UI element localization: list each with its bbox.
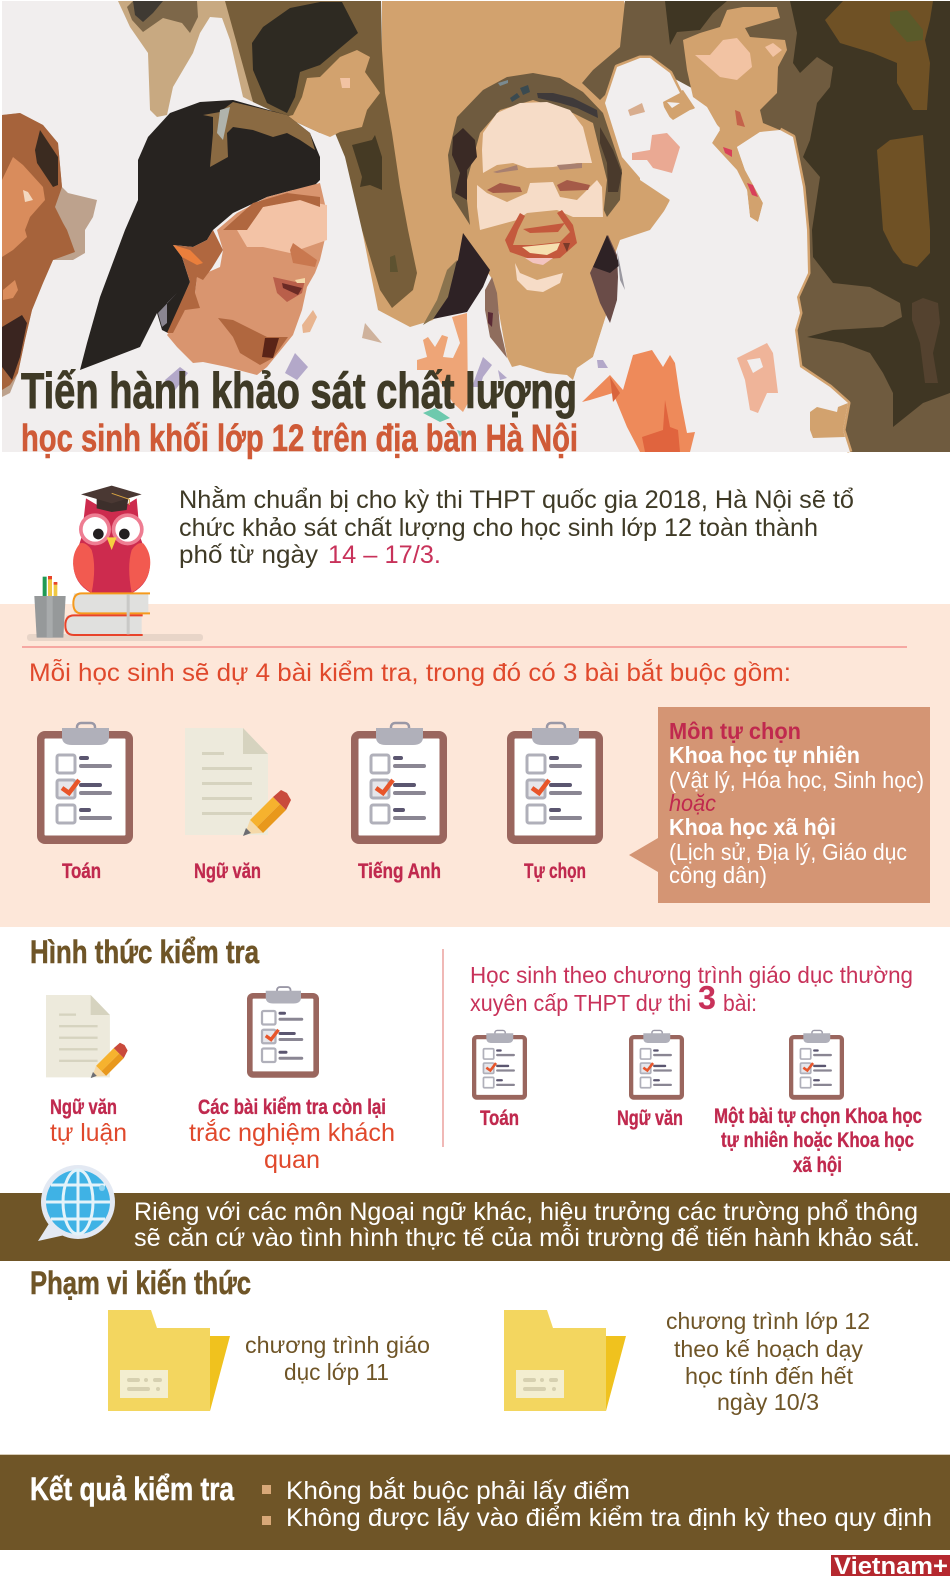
icon: clipboard [247,987,319,1078]
label: Toán: Toán [62,860,101,883]
label: Ngữ văn: Ngữ văn [194,860,261,883]
text: grade 11: dục lớp 11 [284,1359,389,1385]
text: three tests: xuyên cấp THPT dự thi [470,990,691,1016]
logo: Vietnam+: Vietnam+ [834,1553,948,1580]
band: test results [0,1454,950,1550]
label: Ngữ văn essay: tự luận [50,1119,127,1147]
bullet list: Không được lấy vào điểm kiểm tra định kỳ theo quy định [286,1504,932,1532]
label: other tests multiple choice [189,1096,395,1174]
callout: elective subjects: (Vật lý, Hóa học, Sinh học) [669,767,924,793]
text: three tests [470,962,913,1016]
icon: globe speech bubble [38,1165,115,1241]
label: Ngữ văn essay [50,1096,127,1147]
text: grade 12: học tính đến hết [685,1363,854,1389]
heading: four tests: Mỗi học sinh sẽ dự 4 bài kiểm tra, trong đó có 3 bài bắt buộc gồm: [29,658,791,687]
heading: test format: Hình thức kiểm tra [30,934,259,970]
intro text: chức khảo sát chất lượng cho học sinh lớp 12 toàn thành [179,514,818,542]
icon: clipboard Tự chọn [507,723,603,844]
label: elective [714,1105,922,1177]
icon: clipboard Ngữ văn [629,1030,684,1100]
icon: folder grade 12 [504,1310,626,1411]
section: knowledge scope [30,1265,870,1415]
intro text: phố từ ngày [179,541,319,569]
text: three tests: bài: [723,990,757,1016]
callout: elective subjects: Môn tự chọn [669,718,801,744]
text: grade 12: chương trình lớp 12 [666,1308,870,1334]
band: foreign language note: Riêng với các môn Ngoại ngữ khác, hiệu trưởng các trường phổ thông [134,1198,918,1226]
band: foreign language note: sẽ căn cứ vào tình hình thực tế của mỗi trường để tiến hành khảo sát. [134,1223,920,1252]
label: other tests multiple choice: quan [264,1146,320,1174]
intro text [179,485,854,569]
bullet list [262,1476,932,1532]
icon: folder grade 11 [108,1310,230,1411]
callout: elective subjects: công dân) [669,862,767,888]
icon: clipboard elective [789,1030,844,1100]
text: grade 12: theo kế hoạch dạy [674,1336,863,1362]
label: Ngữ văn essay: Ngữ văn [50,1096,117,1119]
bullet list: Không bắt buộc phải lấy điểm [286,1476,630,1505]
callout: elective subjects: Khoa học tự nhiên [669,742,860,768]
label: Tiếng Anh: Tiếng Anh [358,860,441,883]
icon: clipboard Tiếng Anh [351,723,447,844]
heading: test results: Kết quả kiểm tra [30,1471,234,1507]
intro text: Nhằm chuẩn bị cho kỳ thi THPT quốc gia 2018, Hà Nội sẽ tổ [179,485,854,514]
callout: elective subjects [629,707,930,903]
icon: clipboard Toán [472,1030,527,1100]
text: grade 12: ngày 10/3 [717,1389,819,1415]
callout: elective subjects: Khoa học xã hội [669,814,836,840]
title: Tiến hành khảo sát chất lượng [21,363,577,419]
text: three tests: 3 [698,979,716,1016]
band: foreign language note [0,1193,950,1261]
icon: document [46,995,128,1078]
icon: document Ngữ văn [185,728,291,836]
panel: four tests [0,604,950,927]
heading: knowledge scope: Phạm vi kiến thức [30,1265,251,1301]
text: three tests: Học sinh theo chương trình giáo dục thường [470,962,913,988]
label: Ngữ văn: Ngữ văn [617,1107,683,1130]
intro text: 14 – 17/3. [328,541,441,569]
label: Tự chọn: Tự chọn [524,860,586,883]
photo banner: students [2,1,950,452]
text: grade 12 [666,1308,870,1415]
callout: elective subjects: (Lịch sử, Địa lý, Giáo dục [669,839,907,865]
callout: elective subjects: hoặc [669,790,716,816]
title [21,363,578,460]
text: grade 11 [245,1332,430,1385]
label: elective: xã hội [793,1154,842,1177]
title: học sinh khối lớp 12 trên địa bàn Hà Nội [21,418,578,460]
label: other tests multiple choice: Các bài kiểm tra còn lại [198,1096,386,1119]
section: test format [30,934,395,1174]
text: grade 11: chương trình giáo [245,1332,430,1358]
label: Toán: Toán [480,1107,519,1130]
illustration: owl on books [27,486,203,641]
icon: clipboard Toán [37,723,133,844]
section: continuing-education students [470,962,922,1177]
label: other tests multiple choice: trắc nghiệm khách [189,1118,395,1147]
